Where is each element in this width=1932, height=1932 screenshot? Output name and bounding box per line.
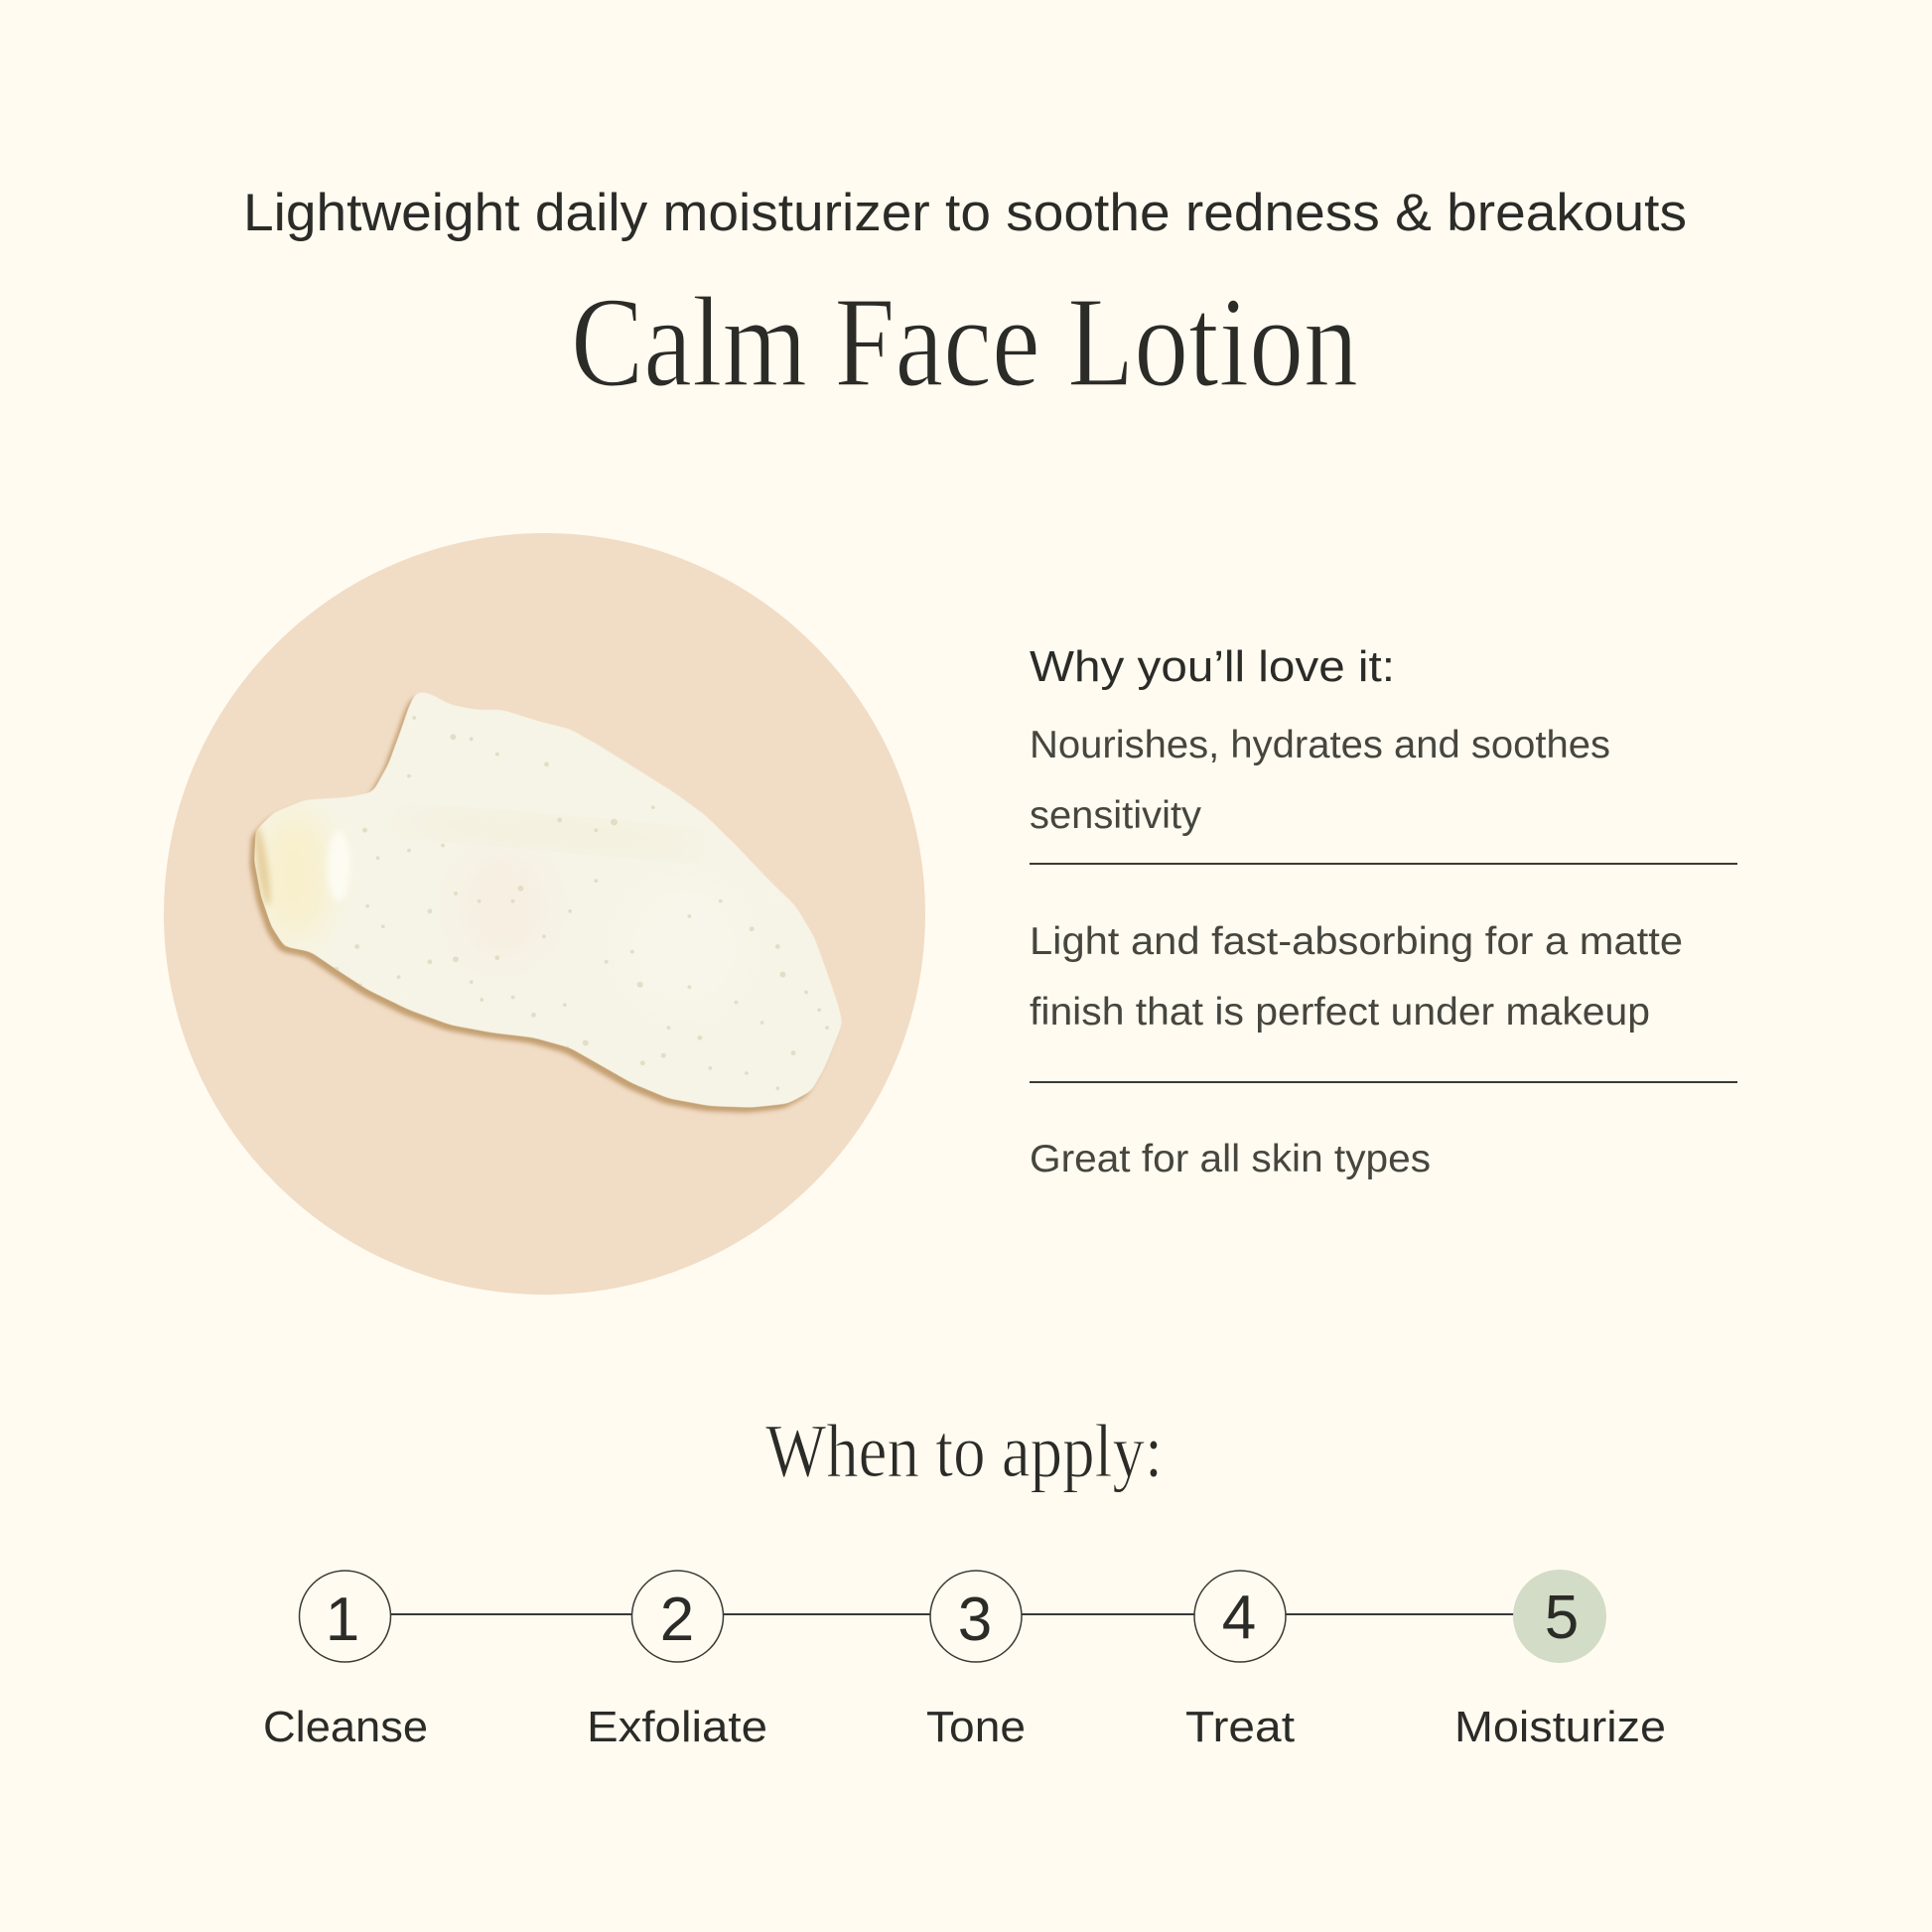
step 2: exfoliate: 2 [660, 1586, 694, 1654]
lotion smear [249, 691, 843, 1113]
benefits heading: Why you’ll love it: [1030, 642, 1395, 691]
title: Calm Face Lotion [571, 271, 1358, 414]
when to apply heading: When to apply: [765, 1410, 1163, 1493]
peach circle [164, 533, 925, 1295]
panel: product swatch [164, 533, 925, 1295]
step 4: treat [1185, 1571, 1295, 1751]
step 3: tone: 3 [958, 1586, 992, 1654]
step 2: exfoliate: Exfoliate [587, 1703, 767, 1751]
routine steps timeline [263, 1570, 1666, 1751]
benefit 2: finish that is perfect under makeup [1030, 991, 1650, 1034]
benefit 2: Light and fast-absorbing for a matte [1030, 920, 1683, 963]
step 3: tone: Tone [926, 1703, 1026, 1751]
step 3: tone [926, 1571, 1026, 1751]
step 4: treat: 4 [1222, 1584, 1256, 1652]
benefit 1 [1030, 724, 1610, 837]
panel: benefits [1030, 642, 1737, 1180]
subtitle: Lightweight daily moisturizer to soothe redness & breakouts [243, 184, 1687, 242]
step 2: exfoliate [587, 1571, 767, 1751]
step 1: cleanse: 1 [326, 1586, 359, 1654]
benefit 2 [1030, 920, 1683, 1034]
benefit 1: sensitivity [1030, 794, 1202, 837]
step 1: cleanse: Cleanse [263, 1703, 428, 1751]
step 5: moisturize (highlighted): Moisturize [1454, 1703, 1666, 1751]
benefit 3: Great for all skin types [1030, 1138, 1431, 1180]
step 5: moisturize (highlighted) [1454, 1570, 1666, 1751]
step 4: treat: Treat [1185, 1703, 1295, 1751]
step 5: moisturize (highlighted): 5 [1545, 1584, 1579, 1652]
step 1: cleanse [263, 1571, 428, 1751]
benefit 1: Nourishes, hydrates and soothes [1030, 724, 1610, 766]
